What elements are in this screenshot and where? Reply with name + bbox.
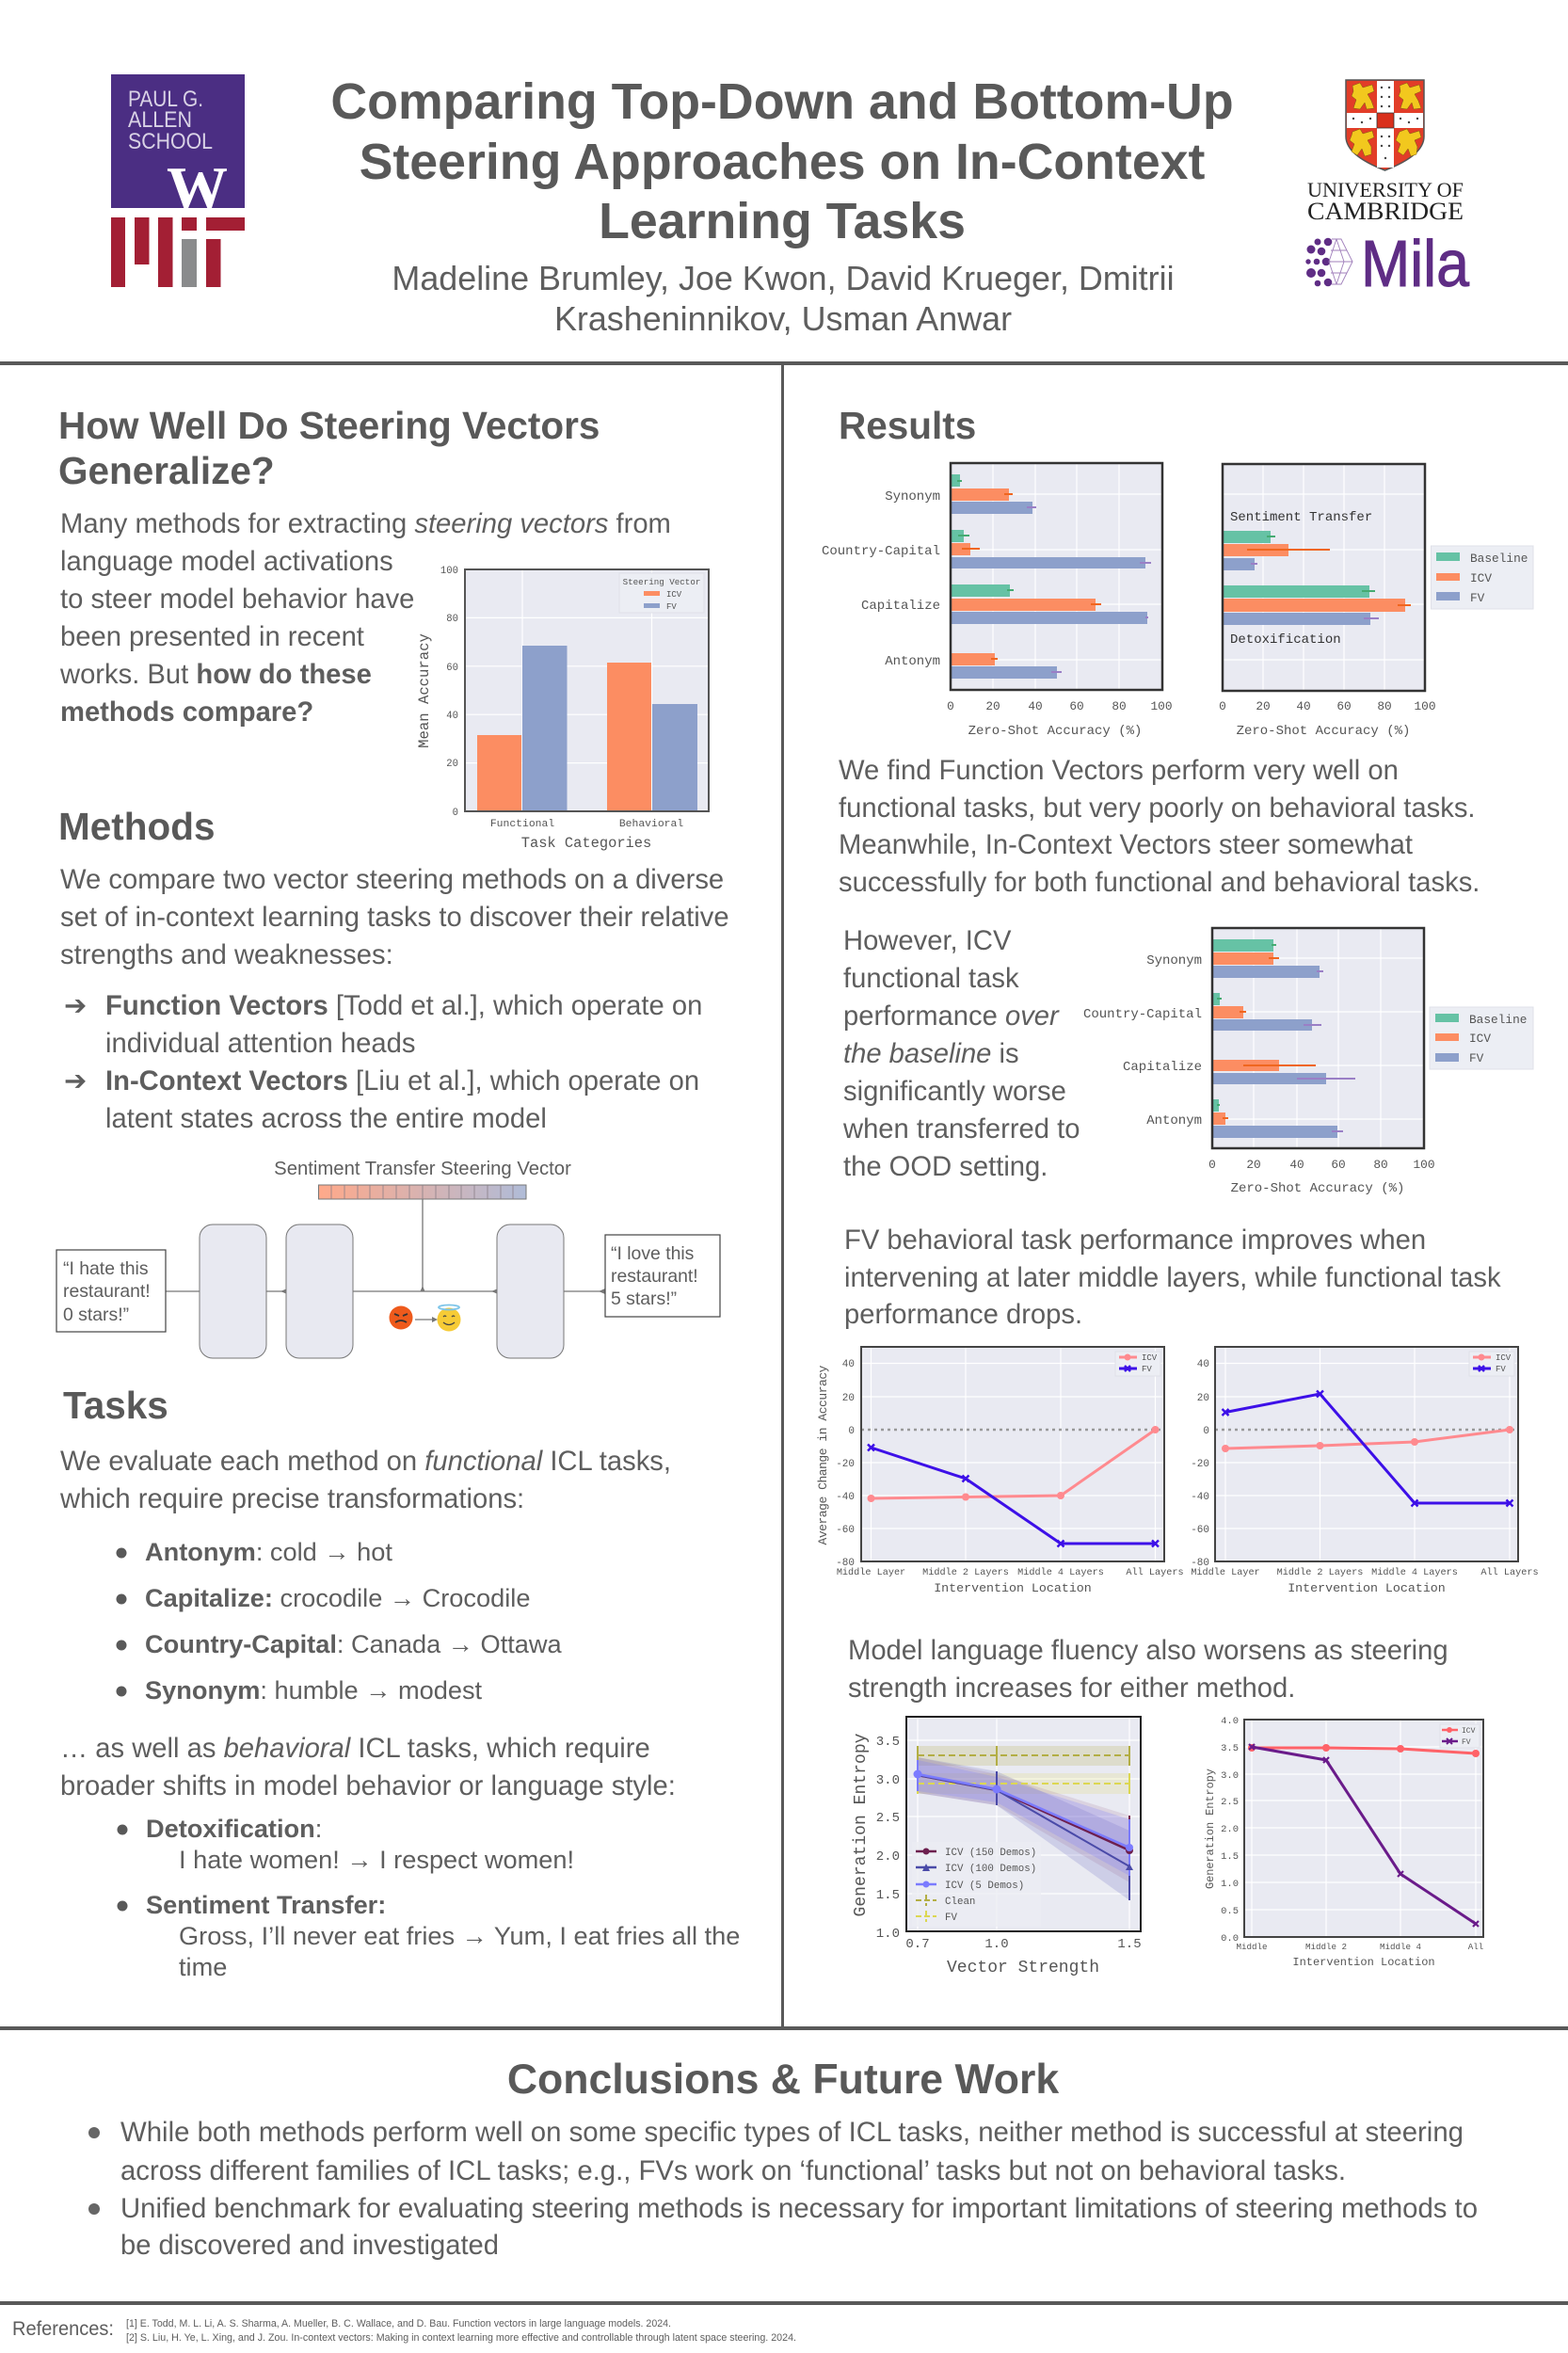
logo: University of Cambridge: CAMBRIDGE xyxy=(1307,198,1464,225)
bar chart: functional tasks zero-shot accuracy: Synonym xyxy=(885,489,940,504)
bar chart: behavioral tasks zero-shot accuracy: Zero-Shot Accuracy (%) xyxy=(1237,724,1410,739)
line chart: generation entropy vs vector strength: 1.5 xyxy=(1117,1937,1142,1952)
line chart: generation entropy vs vector strength: 2.0 xyxy=(876,1849,900,1865)
list: steering methods: latent states across the entire model xyxy=(105,1104,547,1134)
bar chart: OOD zero-shot accuracy: 80 xyxy=(1373,1158,1388,1172)
bar chart: mean accuracy by task category: Steering Vector xyxy=(623,577,700,587)
line chart: generation entropy vs intervention location: 2.0 xyxy=(1221,1824,1239,1835)
line chart: generation entropy vs vector strength: ICV (150 Demos) xyxy=(945,1848,1036,1859)
line chart: generation entropy vs vector strength: Generation Entropy xyxy=(852,1733,871,1916)
text block: introduction: works. But how do these xyxy=(59,660,372,690)
line chart: behavioral tasks change by intervention location: -40 xyxy=(1191,1492,1209,1503)
text block: introduction: methods compare? xyxy=(60,697,313,728)
text block: introduction: Many methods for extracting steering vectors from xyxy=(60,509,671,539)
list: functional tasks: Capitalize: crocodile → Crocodile xyxy=(145,1583,530,1612)
bar chart: mean accuracy by task category: 20 xyxy=(446,759,458,770)
text block: functional intro xyxy=(59,1447,671,1514)
icon: angry face to angel face xyxy=(390,1305,461,1331)
heading: How Well Do Steering Vectors Generalize?: Generalize? xyxy=(58,449,275,492)
logo: Paul G. Allen School xyxy=(111,74,245,221)
text block: FV layer note: intervening at later middle layers, while functional task xyxy=(844,1263,1501,1293)
bar chart: functional tasks zero-shot accuracy: 60 xyxy=(1069,699,1084,713)
list: behavioral tasks: Gross, I’ll never eat fries → Yum, I eat fries all the xyxy=(179,1921,740,1950)
bar chart: functional tasks zero-shot accuracy: Country-Capital xyxy=(822,544,940,559)
line chart: functional tasks change by intervention location: All Layers xyxy=(1126,1567,1184,1578)
bar chart: functional tasks zero-shot accuracy: 80 xyxy=(1112,699,1127,713)
diagram: sentiment transfer steering vector xyxy=(56,1159,720,1358)
line chart: generation entropy vs intervention location: 1.5 xyxy=(1221,1851,1239,1863)
list: steering methods: individual attention heads xyxy=(105,1029,415,1059)
line chart: behavioral tasks change by intervention location: All Layers xyxy=(1480,1567,1539,1578)
list: behavioral tasks: I hate women! → I respect women! xyxy=(179,1845,574,1874)
heading: How Well Do Steering Vectors Generalize?: How Well Do Steering Vectors xyxy=(58,404,600,447)
logo: Mila xyxy=(1305,227,1469,300)
line chart: behavioral tasks change by intervention location: ICV xyxy=(1496,1353,1512,1363)
text block: result summary xyxy=(839,756,1480,898)
line chart: functional tasks change by intervention location: 40 xyxy=(842,1359,855,1370)
line chart: generation entropy vs intervention location: 0.0 xyxy=(1221,1933,1239,1945)
line chart: behavioral tasks change by intervention location: 40 xyxy=(1197,1359,1209,1370)
line chart: generation entropy vs intervention location: FV xyxy=(1462,1738,1471,1747)
text block: introduction: been presented in recent xyxy=(60,622,364,652)
line chart: generation entropy vs vector strength: ICV (100 Demos) xyxy=(945,1864,1036,1875)
bar chart: functional tasks zero-shot accuracy: 0 xyxy=(947,699,954,713)
legend: Baseline xyxy=(1469,1013,1527,1027)
authors xyxy=(392,260,1175,338)
legend: ICV xyxy=(1470,571,1492,585)
line chart: generation entropy vs intervention location: All xyxy=(1468,1942,1483,1952)
list: steering methods: ➔ xyxy=(64,1066,87,1096)
heading: Results: Results xyxy=(839,404,976,447)
line chart: behavioral tasks change by intervention location: Middle Layer xyxy=(1191,1567,1260,1578)
bar chart: mean accuracy by task category: 60 xyxy=(446,663,458,674)
line chart: generation entropy vs intervention location: 4.0 xyxy=(1221,1716,1239,1727)
text block: introduction: to steer model behavior have xyxy=(60,584,414,615)
list: behavioral tasks: Detoxification: xyxy=(146,1814,322,1843)
bar chart: behavioral tasks zero-shot accuracy xyxy=(1219,464,1533,739)
line chart: functional tasks change by intervention location: -80 xyxy=(836,1558,855,1569)
text block: methods description: We compare two vector steering methods on a diverse xyxy=(60,865,724,895)
line chart: behavioral tasks change by intervention location: 20 xyxy=(1197,1393,1209,1404)
line chart: generation entropy vs vector strength xyxy=(852,1717,1142,1977)
bar chart: functional tasks zero-shot accuracy: Antonym xyxy=(885,654,940,669)
line chart: functional tasks change by intervention location: Intervention Location xyxy=(934,1581,1092,1595)
list: steering methods: Function Vectors [Todd et al.], which operate on xyxy=(105,991,702,1021)
line chart: generation entropy vs vector strength: 3.0 xyxy=(876,1773,900,1788)
line chart: generation entropy vs intervention location: Middle 2 xyxy=(1305,1942,1347,1952)
diagram: sentiment transfer steering vector: Sentiment Transfer Steering Vector xyxy=(274,1159,571,1179)
references: [2] S. Liu, H. Ye, L. Xing, and J. Zou. In-context vectors: Making in context learning more effective and controllable through latent space steering. 2024. xyxy=(126,2332,796,2344)
legend: FV xyxy=(1469,1051,1484,1065)
line chart: behavioral tasks change by intervention location: -60 xyxy=(1191,1525,1209,1536)
line chart: generation entropy vs vector strength: Vector Strength xyxy=(947,1959,1099,1977)
bar chart: mean accuracy by task category: ICV xyxy=(666,590,682,600)
text block: result summary: successfully for both functional and behavioral tasks. xyxy=(839,868,1480,898)
bar chart: functional tasks zero-shot accuracy: 100 xyxy=(1150,699,1173,713)
heading: Tasks: Tasks xyxy=(63,1384,168,1427)
line chart: behavioral tasks change by intervention location: 0 xyxy=(1203,1426,1209,1437)
line chart: functional tasks change by intervention location: Middle 2 Layers xyxy=(922,1567,1009,1578)
bar chart: OOD zero-shot accuracy: 60 xyxy=(1331,1158,1346,1172)
bar chart: OOD zero-shot accuracy: 100 xyxy=(1413,1158,1435,1172)
model blocks xyxy=(200,1225,564,1358)
text block: methods description xyxy=(60,865,729,970)
logo: MIT xyxy=(111,217,245,287)
references xyxy=(12,2318,796,2344)
bar chart: OOD zero-shot accuracy: 20 xyxy=(1246,1158,1261,1172)
bar chart: mean accuracy by task category xyxy=(416,566,709,852)
line chart: generation entropy vs vector strength: 1.0 xyxy=(876,1927,900,1942)
title xyxy=(330,73,1234,249)
line chart: generation entropy vs vector strength: 1.0 xyxy=(984,1937,1009,1952)
line chart: generation entropy vs intervention location: 1.0 xyxy=(1221,1879,1239,1890)
logo: Paul G. Allen School: W xyxy=(167,154,228,221)
input text box: restaurant! xyxy=(63,1281,151,1302)
line chart: generation entropy vs intervention location: Generation Entropy xyxy=(1204,1769,1217,1889)
authors: Krasheninnikov, Usman Anwar xyxy=(554,300,1012,338)
text block: fluency note: Model language fluency also worsens as steering xyxy=(848,1636,1448,1666)
legend: FV xyxy=(1470,591,1485,605)
steering vector bar xyxy=(318,1185,526,1199)
text block: ICV OOD note: functional task xyxy=(843,964,1019,994)
line chart: behavioral tasks change by intervention location: FV xyxy=(1496,1365,1506,1374)
output text box: restaurant! xyxy=(611,1266,698,1287)
list: functional tasks xyxy=(117,1537,563,1705)
title: Learning Tasks xyxy=(599,193,966,249)
output text box: 5 stars!” xyxy=(611,1289,677,1309)
text block: introduction xyxy=(59,509,671,728)
references: [1] E. Todd, M. L. Li, A. S. Sharma, A. Mueller, B. C. Wallace, and D. Bau. Function vectors in large language models. 2024. xyxy=(126,2318,671,2329)
title: Steering Approaches on In-Context xyxy=(360,134,1206,190)
logo: Paul G. Allen School: PAUL G. xyxy=(128,87,203,112)
list: behavioral tasks: time xyxy=(179,1952,227,1981)
bar chart: mean accuracy by task category: 100 xyxy=(440,566,458,577)
bar chart: OOD zero-shot accuracy: Zero-Shot Accuracy (%) xyxy=(1231,1181,1404,1196)
bar chart: OOD zero-shot accuracy: 40 xyxy=(1289,1158,1304,1172)
bar chart: mean accuracy by task category: 80 xyxy=(446,614,458,625)
list: conclusions: Unified benchmark for evaluating steering methods is necessary for important limitations of steering methods to xyxy=(120,2194,1478,2224)
line chart: generation entropy vs intervention location: 2.5 xyxy=(1221,1797,1239,1808)
bar chart: mean accuracy by task category: 40 xyxy=(446,711,458,722)
line chart: behavioral tasks change by intervention location: -80 xyxy=(1191,1558,1209,1569)
list: steering methods: In-Context Vectors [Liu et al.], which operate on xyxy=(105,1066,699,1096)
text block: FV layer note xyxy=(844,1225,1501,1330)
line chart: generation entropy vs vector strength: ICV (5 Demos) xyxy=(945,1881,1024,1892)
bar chart: functional tasks zero-shot accuracy: Capitalize xyxy=(861,599,940,614)
references: References: xyxy=(12,2318,114,2340)
line chart: functional tasks change by intervention location: -20 xyxy=(836,1459,855,1470)
line chart: generation entropy vs intervention location: ICV xyxy=(1462,1727,1476,1736)
bar chart: behavioral tasks zero-shot accuracy: 60 xyxy=(1336,699,1352,713)
line chart: behavioral tasks change by intervention location xyxy=(1191,1347,1539,1595)
line chart: functional tasks change by intervention location: 0 xyxy=(848,1426,855,1437)
list: functional tasks: Country-Capital: Canada → Ottawa xyxy=(145,1629,563,1658)
heading: Conclusions & Future Work: Conclusions & Future Work xyxy=(507,2057,1059,2103)
text block: ICV OOD note xyxy=(842,926,1080,1182)
bar chart: behavioral tasks zero-shot accuracy: 40 xyxy=(1296,699,1311,713)
text block: fluency note: strength increases for either method. xyxy=(848,1673,1295,1704)
list: steering methods xyxy=(64,991,702,1134)
text block: introduction: language model activations xyxy=(60,547,393,577)
text block: result summary: Meanwhile, In-Context Vectors steer somewhat xyxy=(839,830,1413,860)
text block: ICV OOD note: when transferred to xyxy=(842,1114,1080,1144)
line chart: generation entropy vs intervention location: 3.0 xyxy=(1221,1770,1239,1782)
bar chart: behavioral tasks zero-shot accuracy: 20 xyxy=(1256,699,1271,713)
text block: behavioral intro: … as well as behavioral ICL tasks, which require xyxy=(60,1734,650,1764)
line chart: generation entropy vs vector strength: FV xyxy=(945,1913,957,1924)
text block: result summary: functional tasks, but very poorly on behavioral tasks. xyxy=(839,793,1476,824)
line chart: functional tasks change by intervention location: -60 xyxy=(836,1525,855,1536)
authors: Madeline Brumley, Joe Kwon, David Krueger, Dmitrii xyxy=(392,260,1175,297)
text block: FV layer note: performance drops. xyxy=(844,1300,1082,1330)
line chart: generation entropy vs vector strength: 3.5 xyxy=(876,1735,900,1750)
logo: Mila: Mila xyxy=(1361,227,1469,300)
bar chart: OOD zero-shot accuracy: Synonym xyxy=(1146,953,1202,968)
line chart: generation entropy vs intervention location: Intervention Location xyxy=(1292,1956,1435,1969)
bar chart: OOD zero-shot accuracy: Antonym xyxy=(1146,1113,1202,1128)
bar chart: mean accuracy by task category: Functional xyxy=(490,819,554,830)
line chart: functional tasks change by intervention location: Average Change in Accuracy xyxy=(816,1365,830,1545)
bar chart: functional tasks zero-shot accuracy: Zero-Shot Accuracy (%) xyxy=(968,724,1142,739)
line chart: generation entropy vs vector strength: 0.7 xyxy=(905,1937,930,1952)
line chart: functional tasks change by intervention location: FV xyxy=(1142,1365,1152,1374)
bar chart: behavioral tasks zero-shot accuracy: Detoxification xyxy=(1230,632,1341,648)
legend xyxy=(1431,546,1533,609)
text block: result summary: We find Function Vectors perform very well on xyxy=(839,756,1399,786)
list: functional tasks: Antonym: cold → hot xyxy=(145,1537,392,1566)
bar chart: functional tasks zero-shot accuracy xyxy=(822,463,1173,739)
text block: functional intro: We evaluate each method on functional ICL tasks, xyxy=(60,1447,671,1477)
bar chart: OOD zero-shot accuracy: 0 xyxy=(1208,1158,1216,1172)
title: Comparing Top-Down and Bottom-Up xyxy=(330,73,1234,130)
line chart: generation entropy vs vector strength: Clean xyxy=(945,1897,975,1908)
input text box: “I hate this xyxy=(63,1258,149,1279)
bar chart: OOD zero-shot accuracy: Capitalize xyxy=(1123,1060,1202,1075)
bar chart: mean accuracy by task category: FV xyxy=(666,602,677,612)
bar chart: behavioral tasks zero-shot accuracy: Sentiment Transfer xyxy=(1230,510,1372,525)
bar chart: mean accuracy by task category: Mean Accuracy xyxy=(416,633,433,748)
list: functional tasks: Synonym: humble → modest xyxy=(145,1675,483,1705)
line chart: generation entropy vs intervention location: 3.5 xyxy=(1221,1743,1239,1754)
line chart: generation entropy vs intervention location xyxy=(1204,1716,1483,1969)
output text box xyxy=(605,1235,720,1317)
list: steering methods: ➔ xyxy=(64,991,87,1021)
logo: University of Cambridge: UNIVERSITY OF xyxy=(1307,178,1464,201)
list: behavioral tasks: Sentiment Transfer: xyxy=(146,1890,386,1919)
text block: ICV OOD note: the OOD setting. xyxy=(843,1152,1048,1182)
line chart: functional tasks change by intervention location: Middle 4 Layers xyxy=(1017,1567,1104,1578)
text block: ICV OOD note: However, ICV xyxy=(843,926,1012,956)
line chart: generation entropy vs intervention location: 0.5 xyxy=(1221,1906,1239,1917)
text block: methods description: strengths and weaknesses: xyxy=(60,940,393,970)
bar chart: functional tasks zero-shot accuracy: 20 xyxy=(985,699,1000,713)
input text box xyxy=(56,1250,166,1332)
line chart: behavioral tasks change by intervention location: Middle 4 Layers xyxy=(1371,1567,1458,1578)
heading: Methods: Methods xyxy=(58,805,215,848)
bar chart: mean accuracy by task category: Behavioral xyxy=(619,819,683,830)
bar chart: mean accuracy by task category: Task Categories xyxy=(521,835,651,852)
logo: Paul G. Allen School: SCHOOL xyxy=(128,129,213,154)
output text box: “I love this xyxy=(611,1243,694,1264)
bar chart: mean accuracy by task category: 0 xyxy=(453,808,458,819)
legend: ICV xyxy=(1469,1032,1491,1046)
text block: fluency note xyxy=(848,1636,1448,1704)
line chart: functional tasks change by intervention location: ICV xyxy=(1142,1353,1158,1363)
bar chart: OOD zero-shot accuracy xyxy=(1083,928,1533,1196)
list: conclusions: While both methods perform well on some specific types of ICL tasks, neither method is successful at steering xyxy=(120,2118,1464,2148)
line chart: functional tasks change by intervention location xyxy=(816,1347,1184,1595)
line chart: behavioral tasks change by intervention location: Middle 2 Layers xyxy=(1277,1567,1363,1578)
text block: methods description: set of in-context learning tasks to discover their relative xyxy=(60,903,729,933)
bar chart: behavioral tasks zero-shot accuracy: 0 xyxy=(1219,699,1226,713)
line chart: generation entropy vs vector strength: 1.5 xyxy=(876,1888,900,1903)
line chart: generation entropy vs intervention location: Middle 4 xyxy=(1380,1942,1422,1952)
heading: How Well Do Steering Vectors Generalize? xyxy=(58,404,600,492)
line chart: functional tasks change by intervention location: Middle Layer xyxy=(837,1567,905,1578)
bar chart: OOD zero-shot accuracy: Country-Capital xyxy=(1083,1007,1202,1022)
bar chart: functional tasks zero-shot accuracy: 40 xyxy=(1028,699,1043,713)
line chart: behavioral tasks change by intervention location: -20 xyxy=(1191,1459,1209,1470)
list: conclusions xyxy=(88,2118,1478,2261)
text block: FV layer note: FV behavioral task performance improves when xyxy=(844,1225,1426,1256)
list: conclusions: be discovered and investigated xyxy=(120,2231,499,2261)
text block: behavioral intro: broader shifts in model behavior or language style: xyxy=(60,1771,676,1801)
list: behavioral tasks xyxy=(117,1814,740,1981)
logo: University of Cambridge xyxy=(1307,80,1464,225)
line chart: behavioral tasks change by intervention location: Intervention Location xyxy=(1288,1581,1446,1595)
line chart: functional tasks change by intervention location: 20 xyxy=(842,1393,855,1404)
text block: behavioral intro xyxy=(60,1734,676,1801)
text block: functional intro: which require precise transformations: xyxy=(59,1484,524,1514)
legend xyxy=(1430,1007,1533,1069)
legend: Baseline xyxy=(1470,552,1528,566)
text block: ICV OOD note: performance over xyxy=(843,1001,1060,1032)
input text box: 0 stars!” xyxy=(63,1305,129,1325)
logo: Paul G. Allen School: ALLEN xyxy=(128,107,192,133)
bar chart: behavioral tasks zero-shot accuracy: 80 xyxy=(1377,699,1392,713)
line chart: generation entropy vs vector strength: 2.5 xyxy=(876,1811,900,1826)
text block: ICV OOD note: the baseline is xyxy=(843,1039,1019,1069)
bar chart: behavioral tasks zero-shot accuracy: 100 xyxy=(1414,699,1436,713)
text block: ICV OOD note: significantly worse xyxy=(843,1077,1066,1107)
list: conclusions: across different families of ICL tasks; e.g., FVs work on ‘functional’ tasks but not on behavioral tasks. xyxy=(120,2156,1346,2186)
line chart: functional tasks change by intervention location: -40 xyxy=(836,1492,855,1503)
line chart: generation entropy vs intervention location: Middle xyxy=(1236,1942,1268,1952)
